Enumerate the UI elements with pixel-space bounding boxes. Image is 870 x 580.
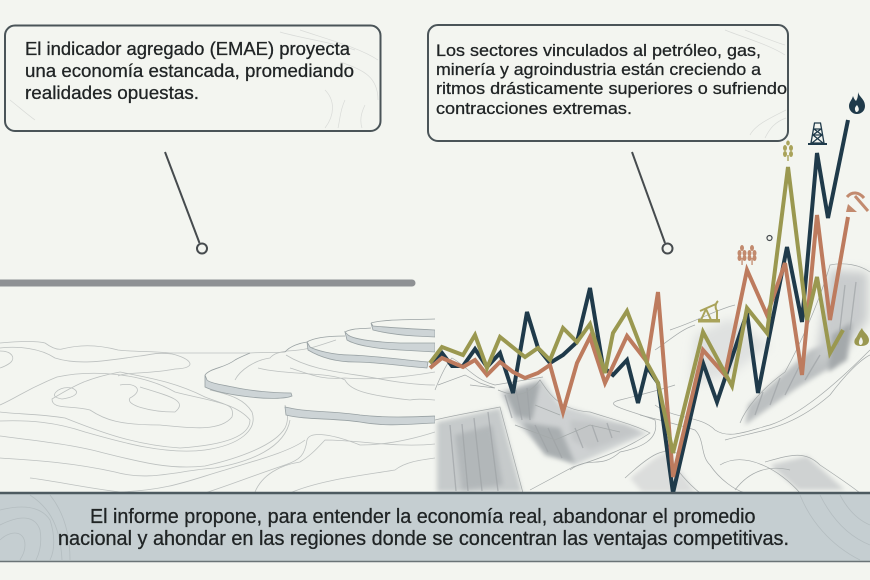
conclusion band: El informe propone, para entender la economía real, abandonar el promedio: [90, 506, 756, 528]
icon: pickaxe and hammer: [846, 193, 868, 212]
callout: agregado: [5, 26, 380, 131]
flat national average line: [0, 280, 412, 286]
pointer: sectores: [632, 152, 672, 254]
series: olive (agroindustria): [430, 167, 843, 453]
illustration: flat contour terrain with terraces: [0, 319, 435, 493]
line chart: sectors: [430, 120, 848, 493]
icon: olive flame mark: [854, 328, 869, 346]
callout: sectores: [428, 25, 788, 141]
series: navy (petróleo y gas): [430, 120, 848, 493]
callout: agregado: una economía estancada, promediando: [25, 61, 354, 81]
callout: agregado: El indicador agregado (EMAE) proyecta: [25, 39, 351, 59]
series: terracotta (minería): [430, 215, 848, 477]
conclusion band: nacional y ahondar en las regiones donde se concentran las ventajas competitivas.: [58, 528, 789, 550]
icon: wheat pair: [738, 245, 756, 265]
pointer: agregado: [165, 152, 207, 254]
icon: oil derrick: [808, 123, 827, 144]
callout: agregado: realidades opuestas.: [25, 83, 199, 103]
small marker circle: [767, 236, 772, 240]
illustration: rugged mountain terrain: [435, 264, 870, 493]
icon: pumpjack: [699, 301, 719, 322]
callout: sectores: Los sectores vinculados al petróleo, gas,: [436, 41, 761, 60]
icon: flame: [849, 92, 865, 114]
icon: wheat olive: [783, 140, 793, 161]
callout: sectores: ritmos drásticamente superiores o sufriendo: [436, 79, 787, 98]
terrace slabs: [205, 375, 292, 398]
conclusion band: [0, 493, 870, 562]
callout: sectores: contracciones extremas.: [436, 99, 632, 118]
callout: sectores: minería y agroindustria están creciendo a: [436, 60, 762, 79]
